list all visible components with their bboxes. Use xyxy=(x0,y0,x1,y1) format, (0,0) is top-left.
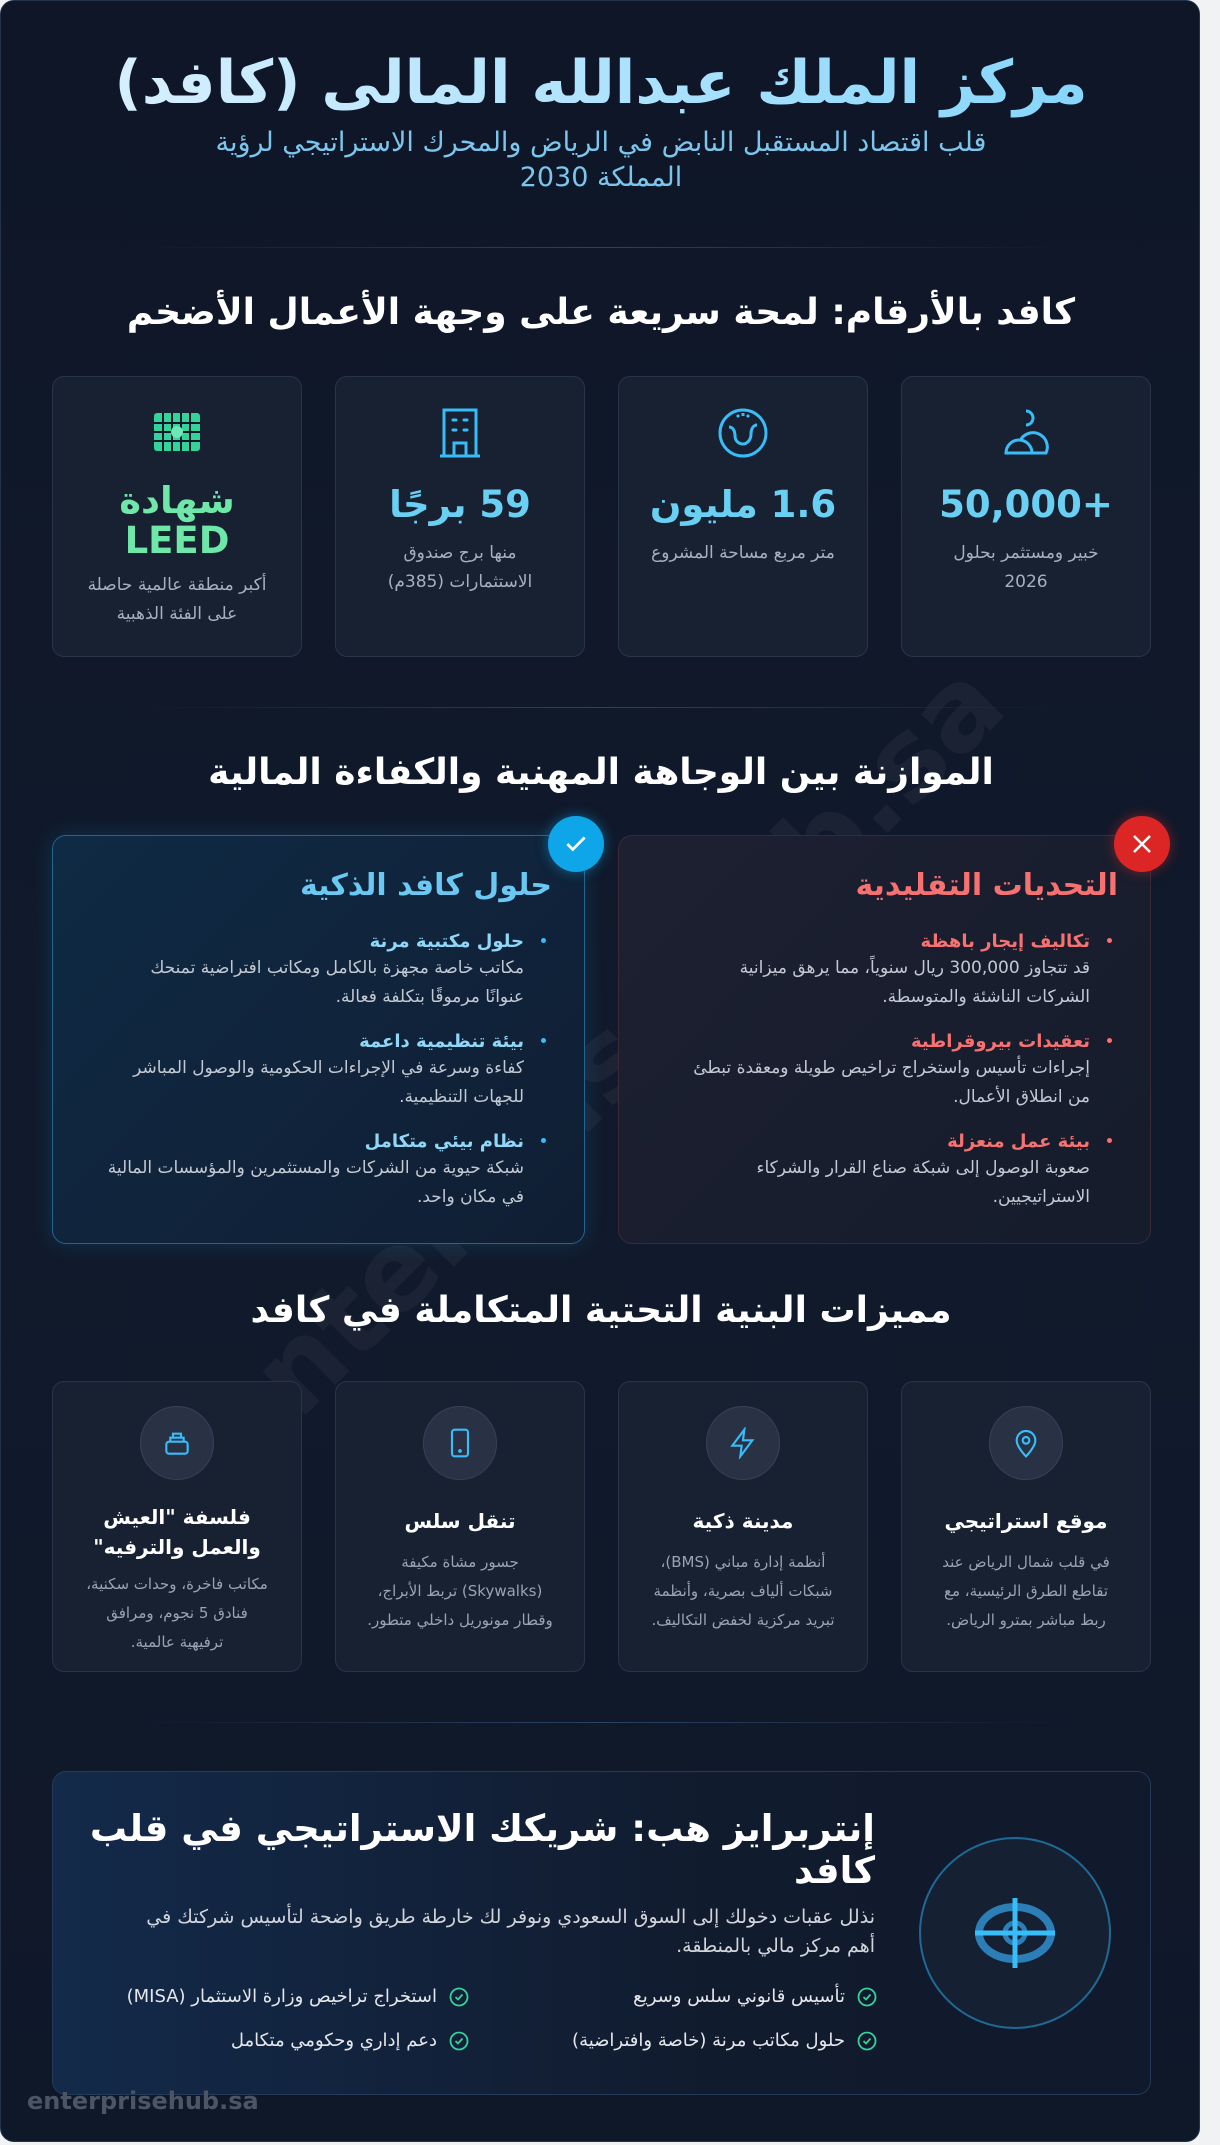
feature: mobility: تنقل سلس xyxy=(404,1509,516,1533)
panel: KAFD solutions: كفاءة وسرعة في الإجراءات الحكومية والوصول المباشر للجهات التنظيمية. xyxy=(133,1058,524,1107)
checklist xyxy=(127,1984,876,2051)
CTA title xyxy=(90,1807,876,1892)
stat: area: متر مربع مساحة المشروع xyxy=(651,543,835,563)
feature: smart city: أنظمة إدارة مباني (BMS)، شبكات ألياف بصرية، وأنظمة تبريد مركزية لخفض التكاليف. xyxy=(651,1553,834,1629)
CTA paragraph: نذلل عقبات دخولك إلى السوق السعودي ونوفر لك خارطة طريق واضحة لتأسيس شركتك في xyxy=(146,1906,875,1928)
panel: traditional challenges: قد تتجاوز 300,000 ريال سنوياً، مما يرهق ميزانية الشركات الناشئة والمتوسطة. xyxy=(740,958,1090,1007)
stat: LEED: LEED xyxy=(125,519,229,562)
subtitle: قلب اقتصاد المستقبل النابض في الرياض والمحرك الاستراتيجي لرؤية xyxy=(216,127,986,158)
panel: traditional challenges: التحديات التقليدية xyxy=(855,868,1118,903)
panel: KAFD solutions: حلول كافد الذكية xyxy=(300,868,552,903)
feature: live work play: فلسفة "العيش والعمل والترفيه" xyxy=(93,1505,261,1559)
stat: towers xyxy=(335,376,585,657)
checklist: دعم إداري وحكومي متكامل xyxy=(231,2030,437,2051)
panel: traditional challenges: تكاليف إيجار باهظة xyxy=(920,931,1090,952)
stat: investors xyxy=(901,376,1151,657)
feature cards xyxy=(52,1381,1151,1672)
panel: KAFD solutions xyxy=(52,835,585,1244)
feature: mobility: جسور مشاة مكيفة xyxy=(401,1553,519,1571)
feature: mobility xyxy=(335,1381,585,1672)
stat: LEED xyxy=(52,376,302,657)
footer brand: enterprisehub.sa xyxy=(27,2087,259,2115)
feature: live work play xyxy=(52,1381,302,1672)
CTA paragraph: أهم مركز مالي بالمنطقة. xyxy=(676,1935,875,1957)
panel: traditional challenges xyxy=(618,835,1151,1244)
stat: LEED: أكبر منطقة عالمية حاصلة على الفئة الذهبية xyxy=(88,575,266,624)
checklist: استخراج تراخيص وزارة الاستثمار (MISA) xyxy=(127,1986,437,2007)
feature: mobility: (Skywalks) تربط الأبراج، وقطار مونوريل داخلي متطور. xyxy=(367,1582,553,1629)
stat: area: 1.6 مليون xyxy=(650,483,836,526)
subtitle xyxy=(216,127,986,193)
badge: x xyxy=(1114,816,1170,872)
feature: location: موقع استراتيجي xyxy=(945,1509,1107,1533)
stat: towers: 59 برجًا xyxy=(389,483,531,526)
heading: infrastructure: مميزات البنية التحتية المتكاملة في كافد xyxy=(251,1290,951,1331)
panel: KAFD solutions: بيئة تنظيمية داعمة xyxy=(359,1031,524,1052)
panel: traditional challenges: تعقيدات بيروقراطية xyxy=(911,1031,1090,1052)
feature: smart city: مدينة ذكية xyxy=(693,1509,793,1533)
panel: KAFD solutions: حلول مكتبية مرنة xyxy=(370,931,524,952)
icon: target circle xyxy=(919,1837,1111,2029)
stat: area xyxy=(618,376,868,657)
panel: KAFD solutions: شبكة حيوية من الشركات والمستثمرين والمؤسسات المالية في مكان واحد. xyxy=(108,1158,524,1207)
CTA paragraph xyxy=(146,1904,875,1957)
heading: numbers: كافد بالأرقام: لمحة سريعة على وجهة الأعمال الأضخم xyxy=(127,292,1075,333)
checklist: حلول مكاتب مرنة (خاصة وافتراضية) xyxy=(572,2030,845,2051)
panel: KAFD solutions: نظام بيئي متكامل xyxy=(365,1131,524,1152)
panel: traditional challenges: صعوبة الوصول إلى شبكة صناع القرار والشركاء الاستراتيجيين. xyxy=(756,1158,1090,1207)
title xyxy=(1,41,1201,125)
checklist: تأسيس قانوني سلس وسريع xyxy=(633,1986,845,2007)
watermark: enterprisehub.sa xyxy=(173,638,1029,1494)
CTA title: كافد xyxy=(794,1849,875,1892)
panel: KAFD solutions: مكاتب خاصة مجهزة بالكامل ومكاتب افتراضية تمنحك عنوانًا مرموقًا بتكلفة فعالة. xyxy=(150,958,524,1007)
title: مركز الملك عبدالله المالى (كافد) xyxy=(114,48,1088,118)
stat: towers: منها برج صندوق الاستثمارات (385م) xyxy=(388,543,532,592)
stat: LEED: شهادة xyxy=(119,479,235,522)
stat: investors: 50,000+ xyxy=(939,483,1113,526)
subtitle: المملكة 2030 xyxy=(520,162,682,193)
badge: check xyxy=(548,816,604,872)
feature: smart city xyxy=(618,1381,868,1672)
CTA panel xyxy=(52,1771,1151,2095)
panel: traditional challenges: بيئة عمل منعزلة xyxy=(947,1131,1090,1152)
panel: traditional challenges: إجراءات تأسيس واستخراج تراخيص طويلة ومعقدة تبطئ من انطلاق الأعمال. xyxy=(693,1058,1090,1107)
feature: location xyxy=(901,1381,1151,1672)
stat cards xyxy=(52,376,1151,657)
CTA title: إنتربرايز هب: شريكك الاستراتيجي في قلب xyxy=(90,1807,875,1850)
heading: comparison: الموازنة بين الوجاهة المهنية والكفاءة المالية xyxy=(208,752,994,793)
stat: investors: خبير ومستثمر بحلول 2026 xyxy=(953,543,1099,592)
feature: location: في قلب شمال الرياض عند تقاطع الطرق الرئيسية، مع ربط مباشر بمترو الرياض. xyxy=(942,1553,1110,1629)
feature: live work play: مكاتب فاخرة، وحدات سكنية، فنادق 5 نجوم، ومرافق ترفيهية عالمية. xyxy=(86,1575,268,1651)
